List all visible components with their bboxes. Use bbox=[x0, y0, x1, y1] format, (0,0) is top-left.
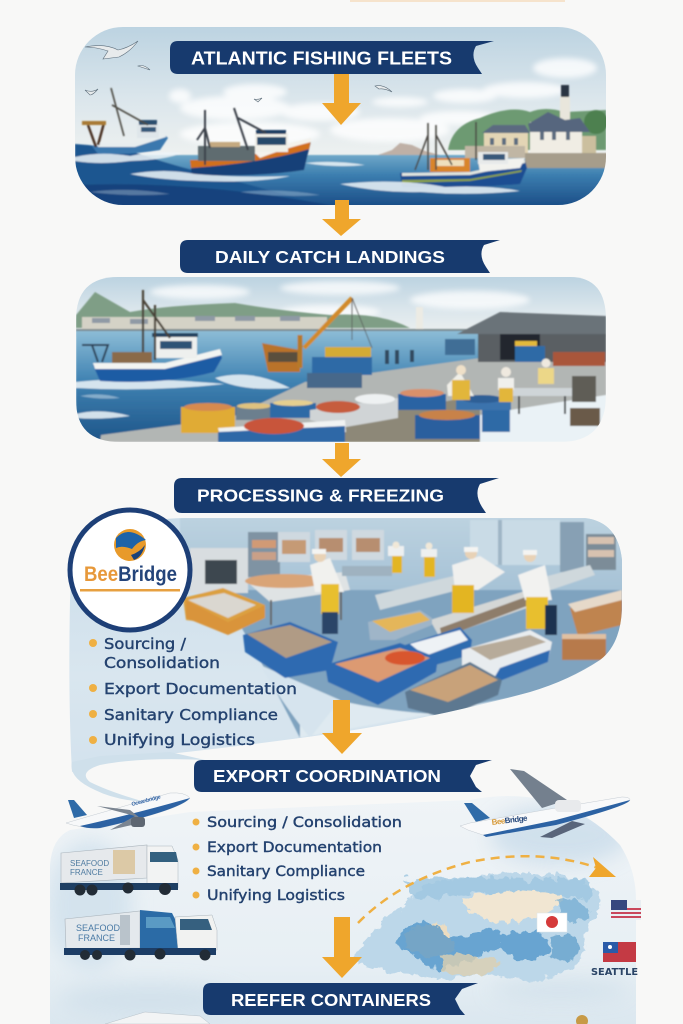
workers bbox=[310, 542, 557, 635]
pedestrians on the quay bbox=[385, 350, 414, 364]
banner: reefer containers: REEFER CONTAINERS bbox=[231, 990, 431, 1010]
dock surface bbox=[100, 350, 606, 442]
crane boat bbox=[262, 298, 372, 388]
banner: export coordination: EXPORT COORDINATION bbox=[213, 766, 441, 786]
boat: far left trawler bbox=[82, 88, 168, 154]
town and lighthouse bbox=[448, 85, 610, 168]
bullet list: BeeBridge services: Consolidation bbox=[104, 654, 220, 672]
arrow: export to reefer bbox=[322, 917, 362, 978]
clouds bbox=[150, 281, 530, 319]
arrow: route head bbox=[589, 857, 616, 877]
seafood crates bbox=[183, 588, 622, 718]
arrow: processing to export bbox=[322, 700, 362, 754]
bullet list: BeeBridge services: Unifying Logistics bbox=[104, 731, 255, 749]
icon: large BeeBridge plane: BeeBridge bbox=[491, 814, 529, 827]
panel: processing and freezing scene bbox=[68, 518, 624, 780]
workers bbox=[447, 358, 554, 402]
gulls bbox=[85, 41, 392, 102]
white swoosh under the processing panel bbox=[71, 752, 205, 802]
banner: Atlantic fishing fleets bbox=[170, 41, 494, 74]
crates on the quay bbox=[181, 376, 600, 442]
truck: Seafood France: SEAFOOD bbox=[76, 923, 121, 933]
factory background bbox=[180, 518, 624, 738]
panel: export coordination scene bbox=[48, 785, 636, 1024]
bullet list: BeeBridge services: Sourcing / bbox=[104, 635, 187, 653]
bullet list: export services: Export Documentation bbox=[207, 840, 382, 856]
world map bbox=[352, 873, 602, 979]
truck: Seafood France: FRANCE bbox=[78, 933, 115, 943]
banner: daily catch landings bbox=[180, 240, 500, 273]
container hint at bottom edge bbox=[105, 1012, 210, 1024]
label: Seattle: SEATTLE bbox=[591, 967, 638, 978]
bullet list: export services: Sourcing / Consolidation bbox=[207, 815, 402, 831]
flag: United States bbox=[611, 900, 641, 920]
truck: Seafood France bbox=[64, 910, 217, 960]
truck: refrigerated lorry bbox=[60, 845, 178, 896]
far shore bbox=[76, 292, 410, 328]
arrow: fleets to sea bbox=[322, 74, 361, 125]
market building bbox=[445, 312, 606, 366]
banner: daily catch landings: DAILY CATCH LANDINGS bbox=[215, 247, 445, 267]
clouds bbox=[169, 58, 597, 146]
arrow: landings to processing bbox=[322, 443, 361, 477]
bullet list: BeeBridge services: Export Documentation bbox=[104, 680, 297, 698]
emblem hint at bottom edge bbox=[576, 1015, 588, 1024]
boat: orange striped trawler bbox=[190, 108, 311, 175]
boat: blue landing vessel bbox=[82, 290, 222, 382]
banner: export coordination bbox=[194, 760, 492, 792]
panel: daily catch landings scene bbox=[76, 277, 606, 442]
flag: red and blue bbox=[603, 942, 636, 962]
banner: reefer containers bbox=[203, 983, 478, 1015]
route: dashed flight path bbox=[358, 856, 598, 923]
foam bbox=[76, 375, 290, 419]
arrow: fleets to landings bbox=[322, 200, 361, 236]
icon: globe bbox=[114, 529, 146, 561]
top accent strip bbox=[350, 0, 565, 2]
flag: Japan bbox=[537, 913, 567, 932]
bullet list: export services: Sanitary Compliance bbox=[207, 864, 365, 880]
sea bbox=[146, 154, 605, 205]
boat: harbour trawler bbox=[400, 122, 527, 188]
logo text: BeeBridge bbox=[84, 563, 177, 586]
icon: small plane: Oceanbridge bbox=[131, 794, 161, 808]
banner: processing and freezing: PROCESSING & FREEZING bbox=[197, 486, 444, 506]
truck: refrigerated lorry: FRANCE bbox=[70, 868, 103, 877]
processing tables bbox=[245, 565, 595, 638]
icon: large BeeBridge plane bbox=[460, 769, 630, 838]
bullet list: export services: Unifying Logistics bbox=[207, 888, 345, 904]
icon: small plane bbox=[66, 793, 190, 830]
logo badge: BeeBridge bbox=[70, 510, 190, 630]
panel: Atlantic fishing fleets scene bbox=[75, 27, 610, 207]
banner: Atlantic fishing fleets: ATLANTIC FISHING FLEETS bbox=[191, 48, 452, 68]
banner: processing and freezing bbox=[174, 478, 499, 513]
bullet list: BeeBridge services: Sanitary Compliance bbox=[104, 706, 278, 724]
sea bbox=[76, 330, 479, 440]
distant island bbox=[378, 143, 440, 155]
truck: refrigerated lorry: SEAFOOD bbox=[70, 859, 109, 868]
foam bbox=[75, 152, 520, 196]
bullet list: export services bbox=[192, 815, 402, 904]
bullet list: BeeBridge services bbox=[89, 635, 297, 749]
